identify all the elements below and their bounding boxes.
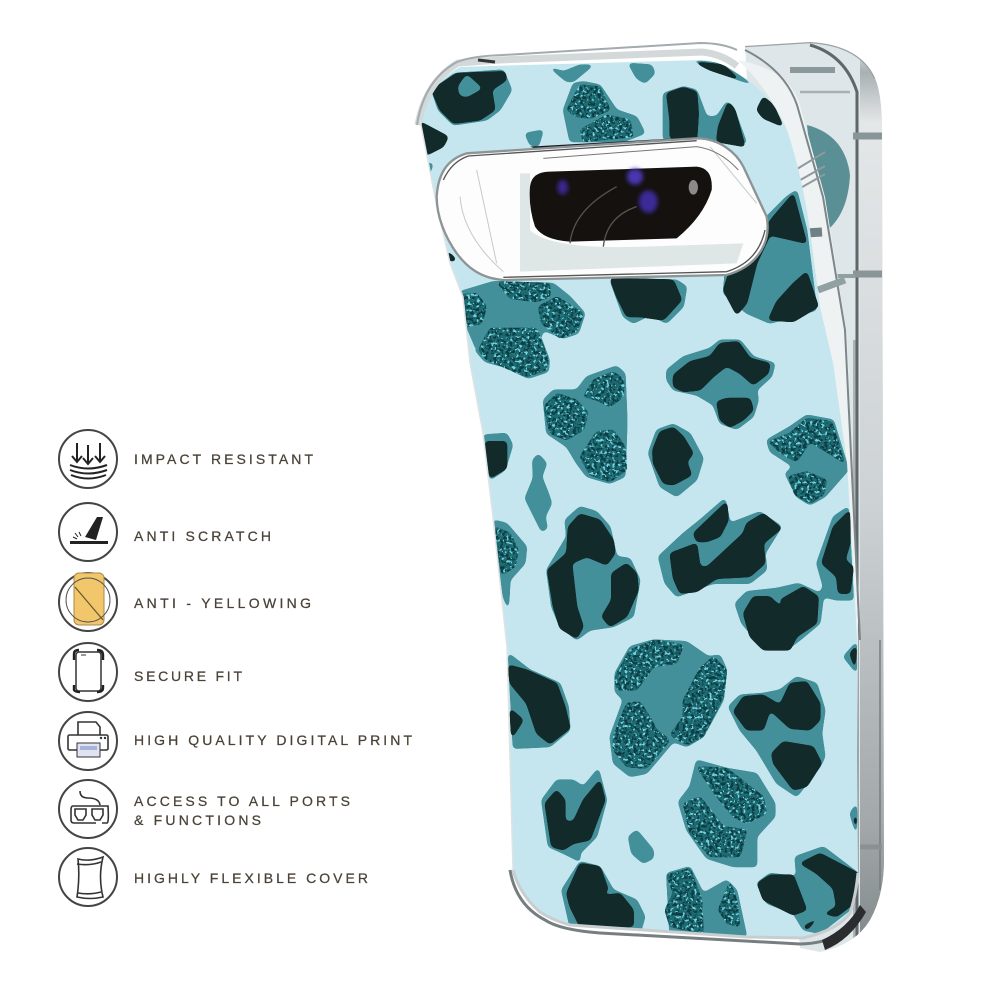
case artwork — [422, 60, 858, 936]
feature: anti scratch: ANTI SCRATCH — [134, 528, 271, 544]
leopard spots middle — [475, 327, 853, 650]
rear phone body — [740, 40, 890, 960]
feature: high quality digital print: HIGH QUALITY DIGITAL PRINT — [134, 732, 412, 748]
feature: impact resistant — [59, 430, 313, 488]
icon: flexible case — [59, 848, 117, 906]
feature: secure fit: SECURE FIT — [134, 668, 242, 684]
leopard spots upper — [420, 60, 818, 350]
icon: impact arrows — [59, 430, 117, 488]
leopard spots lower — [508, 640, 858, 937]
feature: anti yellowing — [59, 573, 311, 631]
case strip: clear flap — [738, 50, 860, 880]
feature: secure fit — [59, 643, 242, 701]
icon: scratch tool — [59, 503, 117, 561]
feature: impact resistant: IMPACT RESISTANT — [134, 451, 313, 467]
feature: access to ports: ACCESS TO ALL PORTS — [134, 793, 350, 809]
icon: yellow phone — [59, 573, 117, 631]
lens surround — [520, 173, 743, 272]
phone product image — [400, 40, 890, 960]
feature list — [59, 430, 412, 906]
icon: printer — [59, 712, 117, 770]
icon: phone bumper — [59, 643, 117, 701]
feature: flexible cover — [59, 848, 368, 906]
feature: access to ports: & FUNCTIONS — [134, 812, 261, 828]
case rim — [417, 43, 866, 950]
feature: anti scratch — [59, 503, 271, 561]
camera ring teal — [807, 125, 850, 232]
camera cutout — [437, 137, 768, 280]
feature: high quality digital print — [59, 712, 412, 770]
icon: ports — [59, 780, 117, 838]
feature: anti yellowing: ANTI - YELLOWING — [134, 595, 311, 611]
feature: access to ports — [59, 780, 350, 838]
camera window — [530, 167, 712, 242]
feature: flexible cover: HIGHLY FLEXIBLE COVER — [134, 870, 368, 886]
